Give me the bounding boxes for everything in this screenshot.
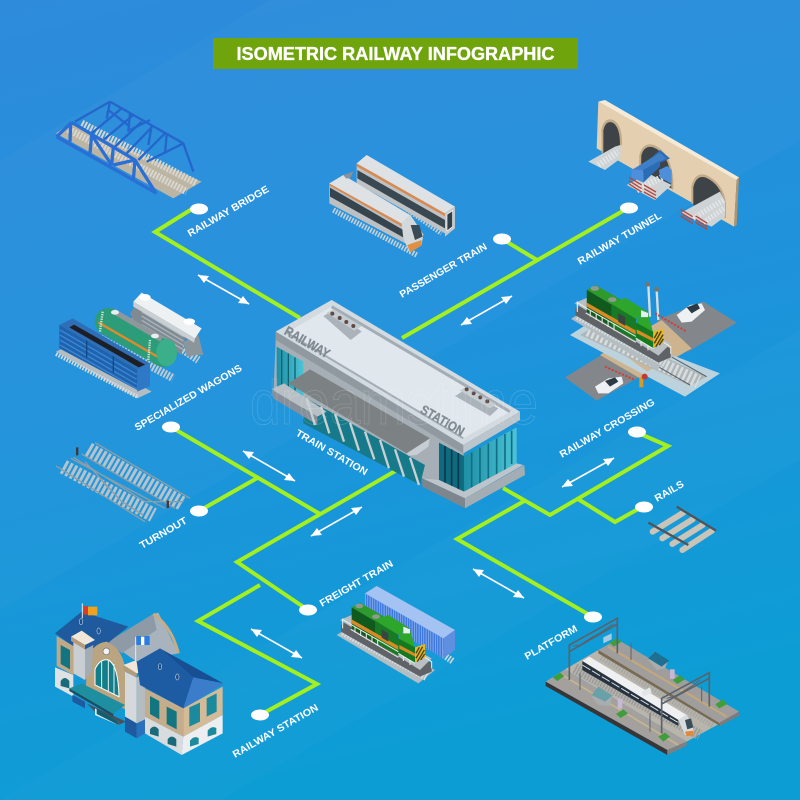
icon: railway bridge (56, 102, 202, 198)
label: freight train: FREIGHT TRAIN (318, 559, 395, 610)
label: train station: TRAIN STATION (294, 428, 369, 478)
icon: railway crossing (565, 282, 737, 401)
connector end dots (162, 202, 653, 720)
icon: rails (648, 507, 716, 550)
icon: railway tunnel (588, 100, 739, 229)
label: platform: PLATFORM (523, 624, 580, 663)
label: passenger train: PASSENGER TRAIN (398, 242, 489, 301)
watermark: dreamstime (250, 369, 538, 438)
roof sign: station: STATION (418, 402, 467, 439)
label: specialized wagons: SPECIALIZED WAGONS (133, 363, 244, 434)
connector lines (155, 208, 668, 715)
icon: turnout (56, 443, 190, 522)
icon: platform (546, 618, 739, 755)
icon: freight train (337, 586, 455, 683)
icon: central train station (272, 300, 525, 508)
label: railway crossing: RAILWAY CROSSING (558, 397, 657, 461)
icon: railway station building (55, 603, 223, 755)
label: railway bridge: RAILWAY BRIDGE (186, 184, 271, 240)
label: railway tunnel: RAILWAY TUNNEL (576, 211, 664, 268)
label: railway station: RAILWAY STATION (231, 703, 321, 761)
title (213, 38, 578, 69)
icon: passenger train (329, 155, 455, 255)
label: rails: RAILS (653, 479, 687, 505)
double arrows (198, 275, 614, 658)
roof sign: railway: RAILWAY (282, 323, 333, 361)
title: ISOMETRIC RAILWAY INFOGRAPHIC (236, 43, 554, 64)
icon: specialized wagons (56, 293, 203, 398)
label: turnout: TURNOUT (138, 516, 189, 552)
